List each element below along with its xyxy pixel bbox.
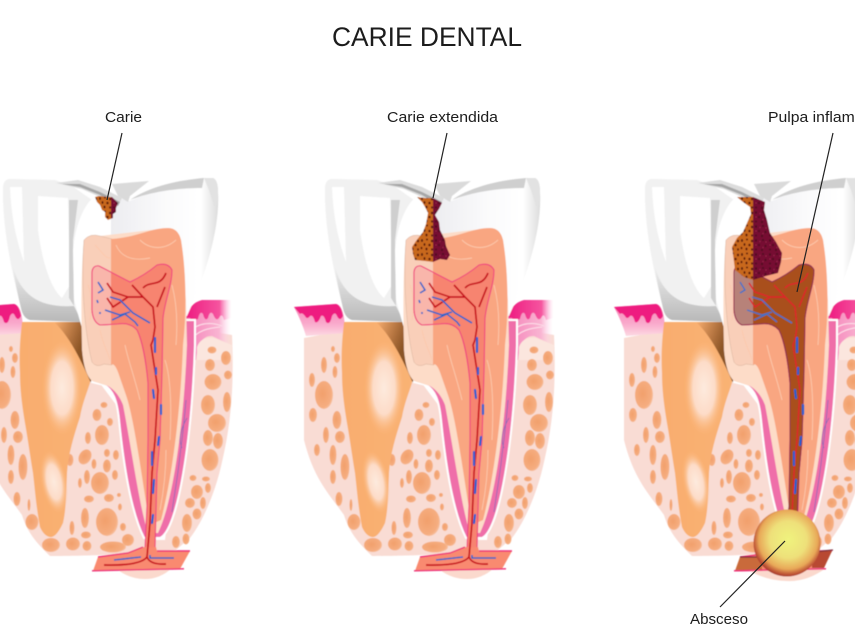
panel: carie (stage 1) [0, 110, 233, 579]
label: Carie: Carie [105, 110, 142, 126]
panel: pulpa inflamada y absceso (stage 3) [614, 109, 855, 628]
illustration: tooth with extended caries [294, 178, 555, 579]
label: Absceso: Absceso [690, 612, 748, 628]
label: Carie extendida: Carie extendida [387, 110, 499, 126]
illustration: tooth with small caries [0, 178, 233, 579]
abscess [734, 510, 833, 581]
inflamed pulp [734, 264, 814, 522]
pointer line: absceso [720, 541, 785, 607]
advanced caries [732, 197, 753, 280]
pointer line: pulpa [797, 133, 833, 292]
title: CARIE DENTAL [332, 22, 522, 52]
pointer line: carie [107, 133, 122, 200]
panel: carie extendida (stage 2) [294, 110, 555, 579]
illustration: tooth with inflamed pulp [614, 178, 855, 581]
pointer line: carie extendida [433, 133, 447, 198]
